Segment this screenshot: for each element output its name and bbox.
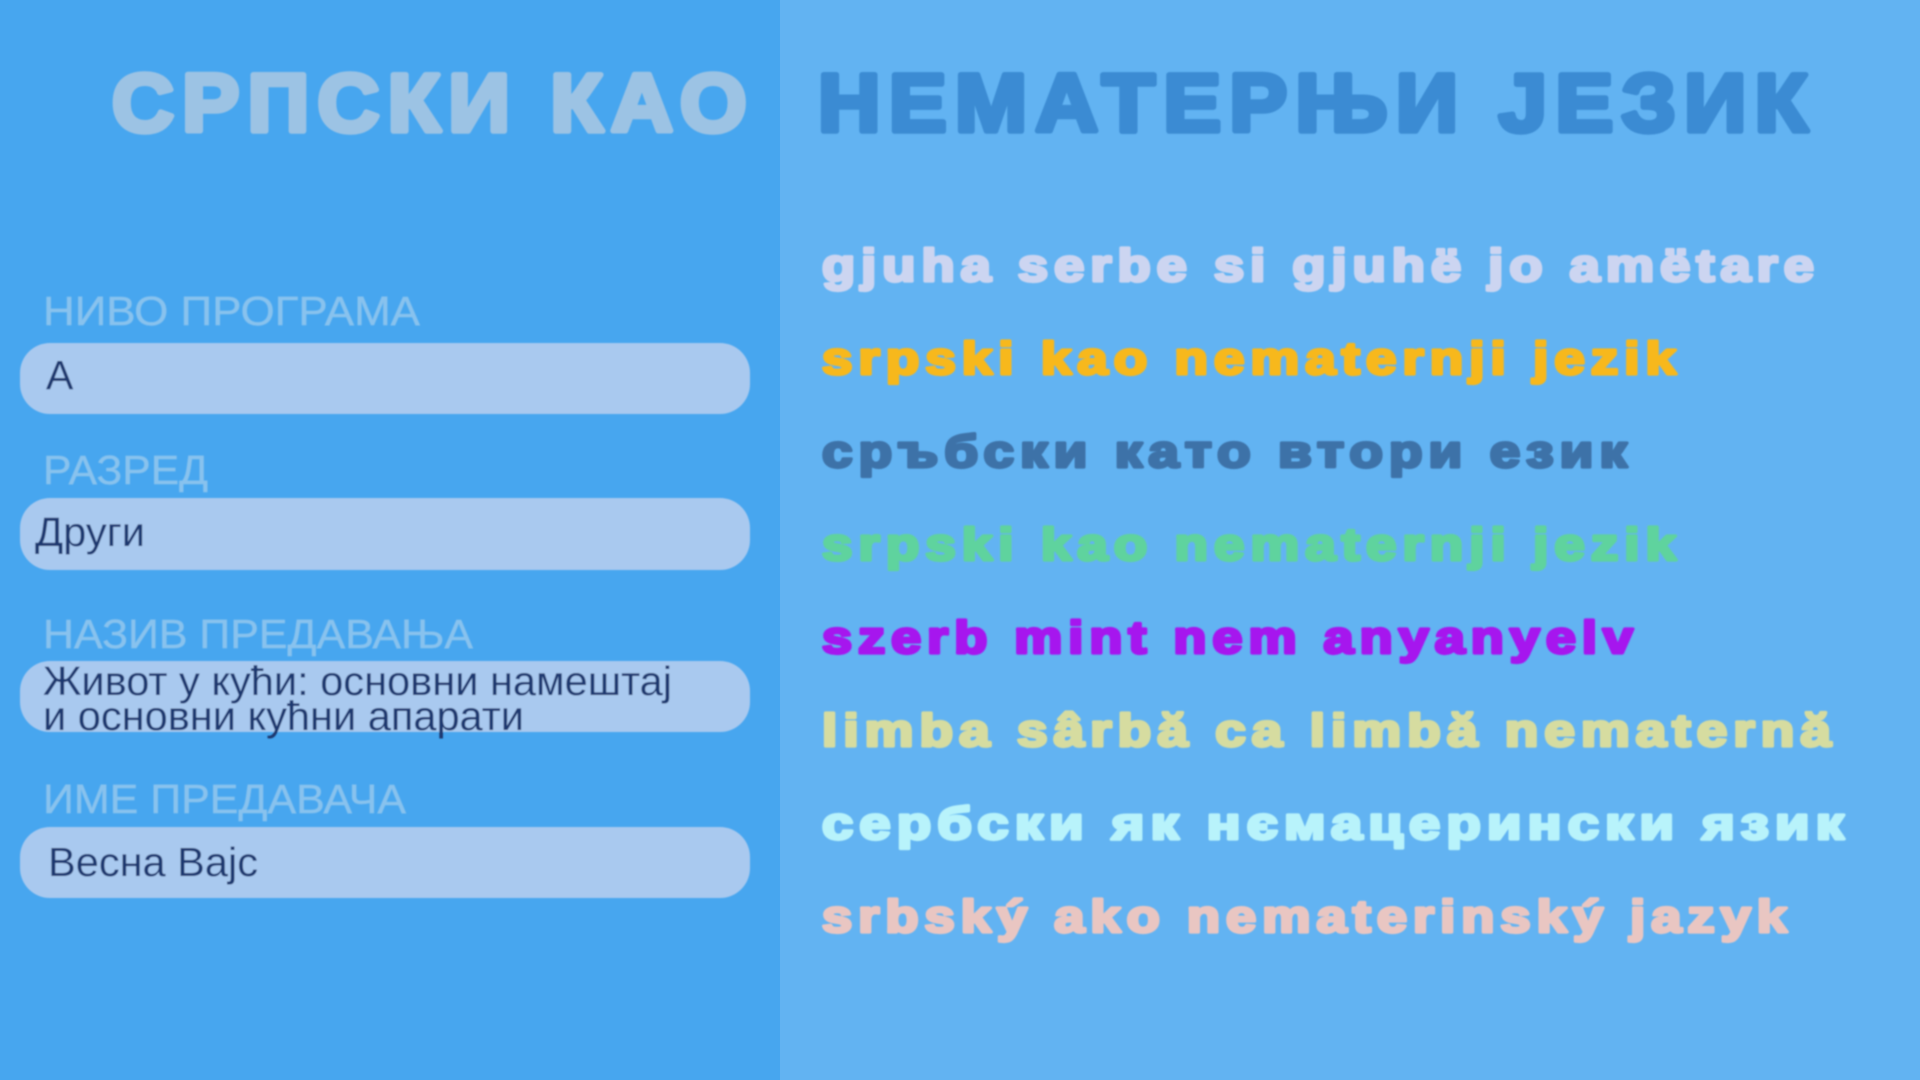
field: teacher name: ИМЕ ПРЕДАВАЧА [43, 776, 407, 822]
field: lecture title: Живот у кући: основни намештај [43, 658, 672, 704]
language: Romanian: limba sârbă ca limbă nematernă [822, 705, 1837, 756]
field: program level: А [46, 352, 74, 398]
language: Serbian Latin, green: srpski kao nematernji jezik [822, 519, 1682, 570]
language: Slovak: srbský ako nematerinský jazyk [822, 891, 1793, 942]
language: Hungarian: szerb mint nem anyanyelv [822, 612, 1639, 663]
title [112, 58, 1816, 149]
language: Albanian: gjuha serbe si gjuhë jo amëtare [822, 240, 1820, 291]
field: lecture title: и основни кућни апарати [43, 693, 524, 739]
field: teacher name [20, 776, 750, 898]
list: language names [822, 240, 1850, 942]
field: lecture title [20, 611, 750, 739]
field: teacher name: Весна Вајс [48, 839, 258, 885]
title: right part: НЕМАТЕРЊИ ЈЕЗИК [818, 58, 1816, 149]
title: left part: СРПСКИ КАО [112, 58, 755, 149]
field: grade [20, 447, 750, 570]
panel: right background [780, 0, 1920, 1080]
field: lecture title: НАЗИВ ПРЕДАВАЊА [43, 611, 474, 657]
language: Bulgarian: сръбски като втори език [822, 426, 1633, 477]
panel: left background [0, 0, 780, 1080]
field: program level: НИВО ПРОГРАМА [43, 288, 421, 334]
field: program level [20, 288, 750, 414]
field: grade: Други [35, 509, 145, 555]
language: Rusyn: сербски як нємацерински язик [822, 798, 1850, 849]
panel: program details form [20, 288, 750, 898]
field: grade: РАЗРЕД [43, 447, 208, 493]
language: Serbian Latin, yellow: srpski kao nematernji jezik [822, 333, 1682, 384]
